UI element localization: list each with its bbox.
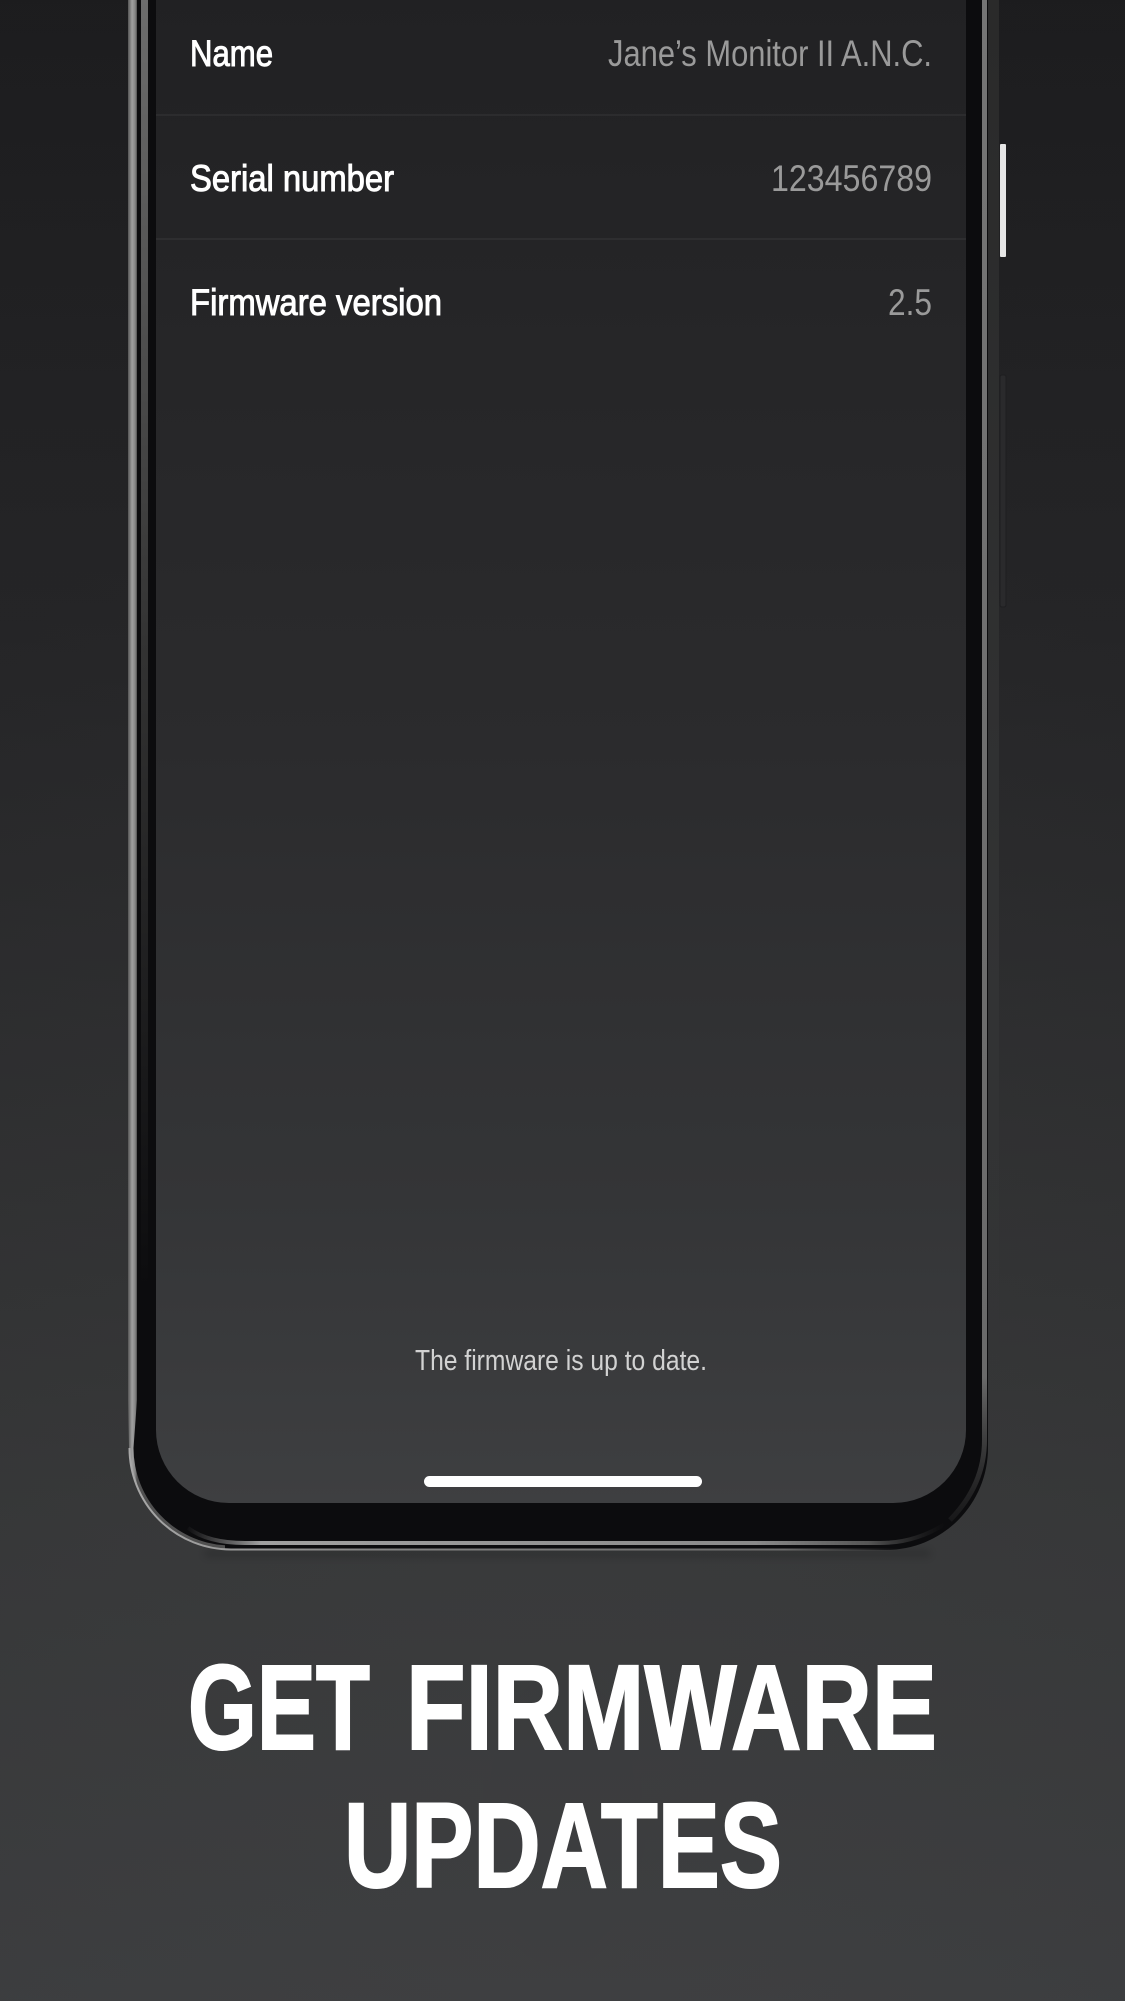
value: serial number: 123456789	[771, 158, 932, 199]
home indicator	[424, 1476, 702, 1487]
phone screen	[156, 0, 966, 1503]
title line 1: FIRMWARE	[406, 1639, 937, 1775]
title line 1	[188, 1639, 937, 1775]
left inner edge	[141, 0, 148, 1290]
inner rim line	[188, 1524, 945, 1543]
row: name	[190, 33, 932, 74]
phone body	[128, 0, 1006, 1550]
status text: The firmware is up to date.	[415, 1345, 707, 1377]
label: firmware version: Firmware version	[190, 282, 442, 323]
title line 2: UPDATES	[344, 1777, 782, 1913]
row: firmware version	[190, 282, 932, 323]
upper side button	[1000, 144, 1006, 257]
outer rim line	[130, 1448, 900, 1550]
label: name: Name	[190, 33, 273, 74]
phone drop shadow	[205, 1550, 930, 1557]
right silver edge	[950, 0, 984, 1520]
lower side button	[1000, 375, 1006, 607]
left silver edge	[128, 0, 225, 1550]
title	[188, 1639, 937, 1913]
label: serial number: Serial number	[190, 158, 394, 199]
value: firmware version: 2.5	[888, 282, 932, 323]
right frame band	[986, 0, 999, 1440]
black bezel	[129, 0, 988, 1550]
title line 1: GET	[188, 1639, 370, 1775]
value: name: Jane’s Monitor II A.N.C.	[608, 33, 932, 74]
row: serial number	[190, 158, 932, 199]
